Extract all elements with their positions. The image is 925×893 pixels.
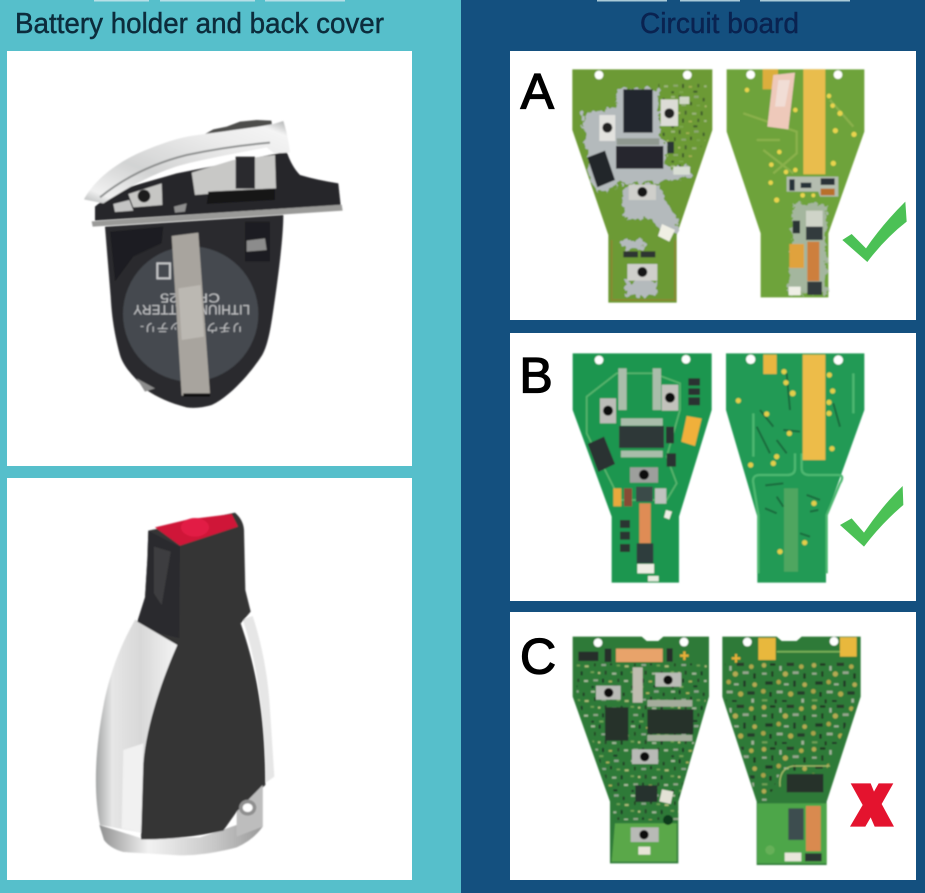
black lower body	[105, 215, 283, 408]
key ring loop	[237, 785, 263, 837]
board A front	[572, 69, 712, 303]
coin battery	[123, 246, 258, 382]
clipped header remnants	[94, 0, 850, 2]
board C back	[722, 637, 861, 865]
right navy background	[461, 0, 925, 893]
letter C: C	[520, 628, 556, 684]
metal slider	[192, 155, 276, 195]
heading: circuit board: Circuit board	[640, 8, 799, 40]
battery holder illustration	[84, 120, 343, 408]
chrome right strip	[243, 616, 274, 783]
black body	[137, 513, 265, 839]
board B front	[573, 353, 712, 583]
red X mark	[850, 783, 894, 827]
board C front	[573, 637, 709, 863]
panel: board B	[510, 333, 916, 601]
chrome base	[99, 785, 263, 855]
green check mark A	[842, 202, 907, 262]
board B back	[726, 353, 864, 583]
letter A: A	[521, 64, 555, 120]
panel: board A	[510, 51, 916, 320]
battery lettering: リチウムバッテリ-	[140, 320, 243, 333]
red button	[155, 514, 238, 546]
board A back	[727, 69, 864, 297]
heading: battery holder and back cover: Battery holder and back cover	[15, 8, 384, 40]
black upper body	[95, 152, 341, 221]
left teal background	[0, 0, 461, 893]
battery lettering: CR2025	[160, 290, 220, 305]
panel: battery holder photo	[7, 51, 412, 466]
knurled ridge	[203, 120, 272, 137]
panel: board C	[510, 612, 916, 880]
screw bracket	[128, 183, 162, 207]
battery lettering	[133, 290, 250, 333]
key fob illustration	[96, 513, 274, 855]
letter B: B	[519, 348, 553, 404]
rail	[92, 205, 343, 227]
metal strap	[172, 233, 210, 396]
chrome cap	[84, 121, 290, 203]
solder patches	[582, 88, 690, 297]
chrome left shell	[96, 619, 177, 833]
panel: key fob photo	[7, 478, 412, 880]
green check mark B	[840, 486, 903, 547]
battery lettering: LITHIUM BATTERY	[133, 302, 250, 318]
